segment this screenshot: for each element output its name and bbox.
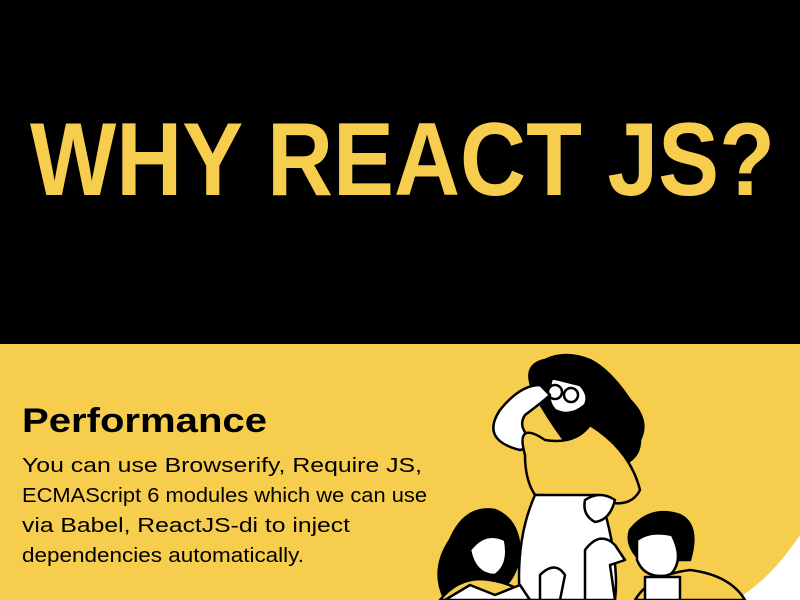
book bbox=[445, 585, 530, 600]
white corner curve bbox=[735, 535, 800, 600]
body text: dependencies automatically. bbox=[22, 545, 304, 567]
hand with puzzle bbox=[540, 568, 565, 600]
header band bbox=[0, 0, 800, 344]
body text bbox=[22, 455, 427, 567]
girl left bbox=[439, 509, 520, 600]
boy bbox=[629, 512, 693, 560]
body text: You can use Browserify, Require JS, bbox=[22, 455, 422, 477]
glasses bbox=[548, 385, 562, 399]
yellow panel bbox=[0, 344, 800, 600]
heading: Performance: Performance bbox=[22, 402, 267, 440]
woman torso bbox=[522, 425, 640, 503]
woman arm raised bbox=[493, 385, 550, 450]
woman skirt bbox=[519, 495, 616, 600]
body text: ECMAScript 6 modules which we can use bbox=[22, 485, 427, 507]
hand on hip bbox=[584, 495, 615, 522]
woman face bbox=[549, 378, 587, 413]
illustration: people bbox=[439, 355, 745, 600]
woman hair bbox=[529, 355, 643, 470]
body text: via Babel, ReactJS-di to inject bbox=[22, 515, 351, 537]
